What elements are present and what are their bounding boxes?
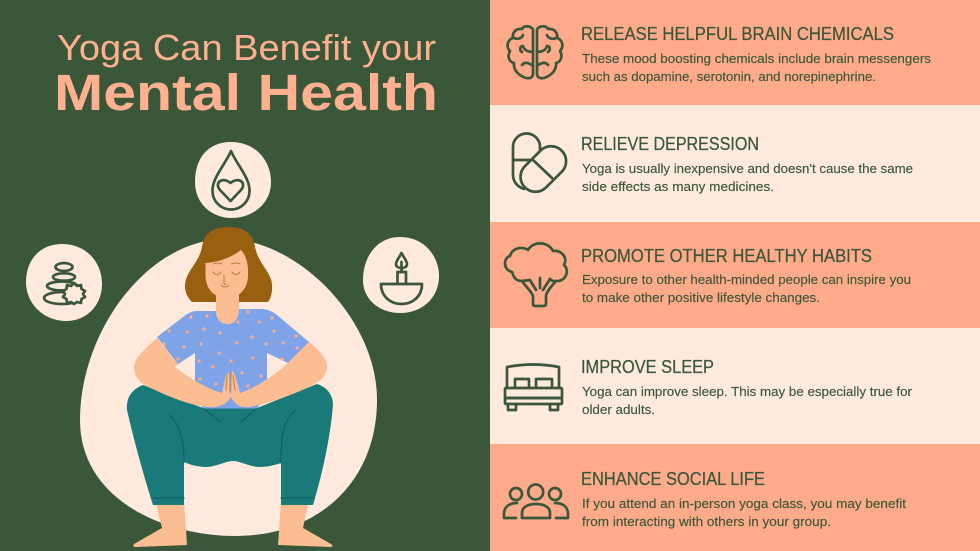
panel: left illustration [0, 0, 490, 551]
hair [185, 227, 272, 302]
icon: pills [513, 134, 572, 198]
body text: Exposure to other health-minded people can inspire you [582, 272, 911, 287]
icon: candle lamp [363, 237, 439, 313]
neck [216, 290, 239, 324]
title [54, 27, 438, 121]
row: relieve depression [490, 105, 980, 222]
arms and praying hands [134, 338, 327, 407]
heading: IMPROVE SLEEP [581, 357, 714, 377]
body text: If you attend an in-person yoga class, you may benefit [582, 496, 906, 511]
icon: stacked stones with flower [26, 244, 102, 321]
icon: bed [505, 364, 562, 410]
row: improve sleep [490, 328, 980, 444]
body text: such as dopamine, serotonin, and norepinephrine. [582, 69, 876, 84]
panel: right benefits list [490, 0, 980, 551]
icon: oil drop with heart [195, 142, 271, 218]
body text: side effects as many medicines. [582, 179, 774, 194]
heading: PROMOTE OTHER HEALTHY HABITS [581, 246, 872, 266]
body text [582, 496, 906, 529]
figure: meditating woman [127, 227, 333, 547]
row: enhance social life [490, 444, 980, 551]
heading: RELIEVE DEPRESSION [581, 134, 759, 154]
body text [582, 161, 913, 194]
background blob [80, 239, 377, 536]
body text [582, 51, 932, 84]
body text [582, 272, 911, 305]
body text: older adults. [582, 402, 655, 417]
body text: to make other positive lifestyle changes. [582, 290, 820, 305]
icon: group of people [504, 484, 568, 518]
body text: Yoga is usually inexpensive and doesn't cause the same [582, 161, 913, 176]
face [206, 250, 248, 298]
row: release helpful brain chemicals [490, 0, 980, 105]
title: Mental Health [54, 64, 438, 121]
body text: These mood boosting chemicals include brain messengers [582, 51, 932, 66]
heading: ENHANCE SOCIAL LIFE [581, 469, 765, 489]
shirt with dots [157, 309, 309, 408]
row: promote other healthy habits [490, 222, 980, 328]
body text: from interacting with others in your group. [582, 514, 831, 529]
icon: brain [508, 26, 562, 78]
heading: RELEASE HELPFUL BRAIN CHEMICALS [581, 24, 894, 44]
body text: Yoga can improve sleep. This may be especially true for [582, 384, 913, 399]
title: Yoga Can Benefit your [57, 27, 436, 68]
icon: broccoli tree [505, 243, 567, 306]
feet [133, 500, 332, 547]
trousers [127, 384, 333, 505]
body text [582, 384, 913, 417]
